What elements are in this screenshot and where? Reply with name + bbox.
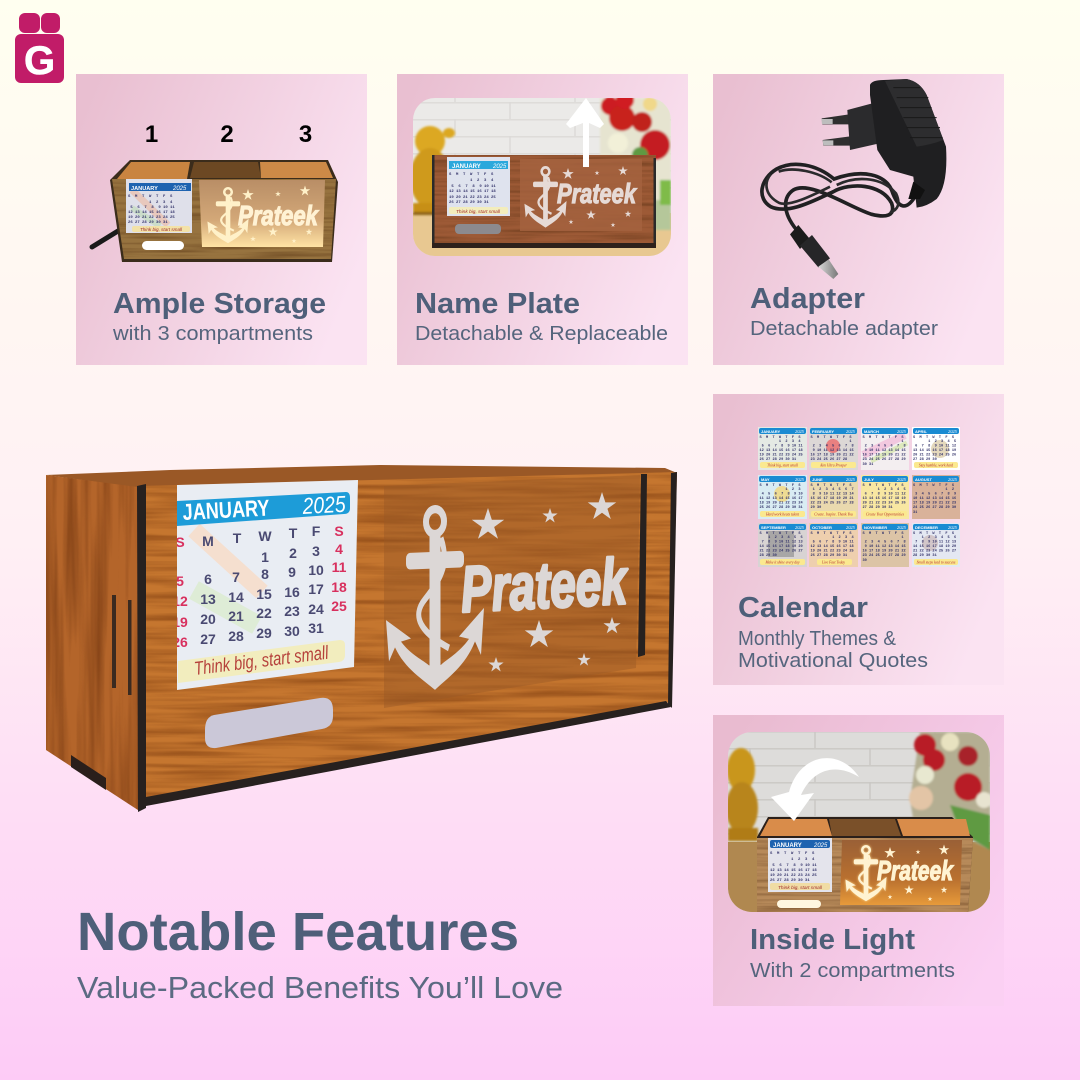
calendar card: JANUARY bbox=[182, 494, 270, 525]
calendar card: 4 bbox=[335, 541, 343, 557]
calendar card: 21 bbox=[228, 608, 244, 624]
calendar card: 17 bbox=[308, 581, 324, 597]
calendar: october bbox=[809, 523, 858, 567]
product: lit desk organiser bbox=[92, 160, 338, 262]
calendar card: 6 bbox=[204, 571, 212, 587]
calendar: january: JANUARY bbox=[761, 429, 781, 434]
main product: wooden desk organiser with calendar and name plate bbox=[46, 465, 677, 812]
calendar card: W bbox=[258, 528, 272, 544]
product photo with detachable plate: 26 27 28 29 30 31 bbox=[449, 201, 491, 205]
panel: calendar bbox=[713, 394, 1004, 685]
brand logo: gift box G: G bbox=[24, 39, 55, 83]
subtitle: Value-Packed Benefits You’ll Love bbox=[77, 970, 563, 1005]
calendar: may: 1 2 3 bbox=[760, 488, 803, 492]
calendar: december: 28 29 30 31 bbox=[913, 554, 939, 558]
calendar card: Think big, start small bbox=[193, 643, 330, 680]
calendar: november: 9 10 11 12 13 14 15 bbox=[862, 545, 908, 549]
product: lit desk organiser: 19 20 21 22 23 24 25 bbox=[128, 216, 177, 220]
calendar: may: 25 26 27 28 29 30 31 bbox=[760, 506, 805, 510]
heading: Name Plate bbox=[415, 288, 580, 320]
black edges and base bbox=[137, 472, 677, 812]
organiser front bbox=[140, 472, 677, 803]
compartment numbers: 1 bbox=[145, 121, 158, 148]
calendar: november: S M T W T F S bbox=[862, 532, 906, 536]
calendar card: 3 bbox=[312, 543, 320, 559]
product photo with light on: 26 27 28 29 30 31 bbox=[770, 879, 812, 883]
calendar: october: 19 20 21 22 23 24 25 bbox=[810, 550, 856, 554]
product: lit desk organiser: 12 13 14 15 16 17 18 bbox=[128, 211, 177, 215]
calendar: january: Think big, start small bbox=[767, 464, 798, 468]
name plate: Prateek bbox=[459, 546, 631, 627]
calendar: march bbox=[861, 427, 909, 470]
product photo with light on: 2025 bbox=[813, 843, 828, 849]
calendar: december: 21 22 23 24 25 26 27 bbox=[913, 550, 958, 554]
calendar: october: 2025 bbox=[846, 525, 856, 530]
heading: Ample Storage bbox=[113, 288, 326, 320]
calendar: july: 13 14 15 16 17 18 19 bbox=[862, 497, 908, 501]
product photo with light on: 5 6 7 8 9 10 11 bbox=[770, 864, 819, 868]
calendar: july: 1 2 3 4 5 bbox=[862, 488, 908, 492]
calendar card: 12 bbox=[172, 593, 188, 609]
calendar: october: 26 27 28 29 30 31 bbox=[810, 554, 849, 558]
calendar: august: 31 bbox=[913, 511, 919, 515]
caption line 2: Motivational Quotes bbox=[738, 650, 928, 672]
calendar: march: 2025 bbox=[897, 429, 907, 434]
calendar: september: 14 15 16 17 18 19 20 bbox=[760, 545, 805, 549]
calendar: december: S M T W T F S bbox=[913, 532, 956, 536]
calendar: june: S M T W T F S bbox=[810, 484, 854, 488]
light window bbox=[205, 698, 333, 748]
calendar: december: Small steps lead to success bbox=[917, 560, 956, 564]
calendar: june: JUNE bbox=[812, 477, 823, 482]
heading: Adapter bbox=[750, 283, 865, 315]
12-month calendar grid bbox=[758, 427, 960, 567]
calendar: april: APRIL bbox=[915, 429, 928, 434]
calendar card: 5 bbox=[176, 573, 184, 589]
calendar: december: DECEMBER bbox=[915, 525, 938, 530]
calendar card: 25 bbox=[331, 598, 347, 614]
calendar: february: 9 10 11 12 13 14 15 bbox=[810, 449, 856, 453]
calendar: april: S M T W T F S bbox=[913, 436, 956, 440]
calendar: september: Make it shine every day bbox=[764, 560, 800, 564]
calendar card: S bbox=[334, 523, 344, 539]
calendar card: T bbox=[233, 530, 242, 546]
calendar: august: 24 25 26 27 28 29 30 bbox=[913, 506, 958, 510]
calendar: february: 23 24 25 26 27 28 bbox=[810, 458, 849, 462]
calendar: september: 1 2 3 4 5 6 bbox=[760, 536, 805, 540]
calendar: october: 12 13 14 15 16 17 18 bbox=[810, 545, 856, 549]
calendar: september: 28 29 30 bbox=[760, 554, 779, 558]
product photo with detachable plate: JANUARY bbox=[452, 164, 481, 170]
calendar card: 14 bbox=[228, 589, 244, 605]
calendar: september: S M T W T F S bbox=[760, 532, 803, 536]
calendar: july: 20 21 22 23 24 25 26 bbox=[862, 502, 908, 506]
calendar card: 16 bbox=[284, 584, 300, 600]
calendar: february: S M T W T F S bbox=[810, 436, 854, 440]
panel: ample storage bbox=[76, 74, 367, 365]
calendar card: S bbox=[175, 534, 185, 550]
calendar card: 1 bbox=[261, 549, 269, 565]
calendar: september: 21 22 23 24 25 26 27 bbox=[760, 550, 805, 554]
calendar: november bbox=[861, 523, 909, 567]
calendar: december: 7 8 9 10 11 12 13 bbox=[913, 540, 958, 544]
calendar: february: FEBRUARY bbox=[812, 429, 834, 434]
calendar: november: 2 3 4 5 6 7 8 bbox=[862, 540, 908, 544]
calendar card: 10 bbox=[308, 562, 324, 578]
product photo with detachable plate: 1 2 3 4 bbox=[449, 179, 496, 183]
calendar card: 7 bbox=[232, 569, 240, 585]
calendar: may: 2025 bbox=[795, 477, 805, 482]
calendar card: 19 bbox=[172, 614, 188, 630]
calendar card: 31 bbox=[308, 620, 324, 636]
calendar card: 24 bbox=[308, 601, 324, 617]
calendar: november: 23 24 25 26 27 28 29 bbox=[862, 554, 908, 558]
calendar: march: 30 31 bbox=[862, 463, 875, 467]
calendar: february: 1 bbox=[810, 440, 854, 444]
heading: Inside Light bbox=[750, 924, 915, 956]
calendar: may: 4 5 6 7 8 9 10 bbox=[760, 492, 805, 496]
calendar: september bbox=[758, 523, 807, 567]
calendar: july: 2025 bbox=[897, 477, 907, 482]
calendar: march: 23 24 25 26 27 28 29 bbox=[862, 458, 908, 462]
calendar: march: 16 17 18 19 20 21 22 bbox=[862, 454, 908, 458]
calendar: july: JULY bbox=[864, 477, 874, 482]
calendar: september: 7 8 9 10 11 12 13 bbox=[760, 540, 805, 544]
calendar: august: 3 4 5 6 7 8 9 bbox=[913, 492, 958, 496]
calendar: january: 1 2 3 4 bbox=[760, 440, 803, 444]
calendar card: 9 bbox=[288, 564, 296, 580]
compartment numbers: 3 bbox=[299, 121, 312, 148]
product: lit desk organiser: 1 2 3 4 bbox=[128, 201, 175, 205]
calendar: march: 2 3 4 5 6 7 8 bbox=[862, 444, 908, 448]
name plate bbox=[384, 475, 640, 708]
calendar card: 22 bbox=[256, 605, 272, 621]
caption: With 2 compartments bbox=[750, 960, 955, 982]
calendar: august: 17 18 19 20 21 22 23 bbox=[913, 502, 958, 506]
product photo with detachable plate: S M T W T F S bbox=[449, 173, 496, 177]
product photo with light on: Think big, start small bbox=[778, 885, 823, 891]
calendar: august: S M T W T F S bbox=[913, 484, 956, 488]
calendar: september: 2025 bbox=[795, 525, 805, 530]
calendar: march: 1 bbox=[862, 440, 906, 444]
caption: Monthly Themes & bbox=[738, 628, 897, 650]
calendar: january bbox=[758, 427, 807, 470]
calendar: february: 16 17 18 19 20 21 22 bbox=[810, 454, 856, 458]
product: lit desk organiser: S M T W T F S bbox=[128, 195, 175, 199]
calendar: february bbox=[809, 427, 858, 470]
calendar: january: 2025 bbox=[795, 429, 805, 434]
calendar: june: 2025 bbox=[846, 477, 856, 482]
arrow: curved down into compartment bbox=[771, 758, 859, 821]
calendar: june: 1 2 3 4 5 6 7 bbox=[810, 488, 856, 492]
calendar: april: 20 21 22 23 24 25 26 bbox=[913, 454, 958, 458]
calendar: april bbox=[912, 427, 960, 470]
calendar: january: 12 13 14 15 16 17 18 bbox=[760, 449, 805, 453]
calendar: february: Aim Ultra Prosper bbox=[819, 464, 848, 468]
calendar: july: Create Your Opportunities bbox=[866, 512, 905, 516]
calendar card: 2025 bbox=[301, 491, 346, 519]
calendar: march: S M T W T F S bbox=[862, 436, 906, 440]
product photo with light on bbox=[726, 732, 992, 912]
calendar: april: Stay humble, work hard bbox=[919, 464, 953, 468]
calendar: may: Hard work beats talent bbox=[765, 512, 800, 516]
caption: Detachable & Replaceable bbox=[415, 323, 668, 345]
calendar: january: S M T W T F S bbox=[760, 436, 803, 440]
product photo with detachable plate: Think big, start small bbox=[456, 209, 501, 215]
calendar: october: 1 2 3 4 bbox=[810, 536, 856, 540]
product photo with light on: 12 13 14 15 16 17 18 bbox=[770, 869, 819, 873]
calendar: january: 19 20 21 22 23 24 25 bbox=[760, 454, 805, 458]
product photo with detachable plate: 2025 bbox=[492, 164, 507, 170]
calendar card: F bbox=[312, 523, 321, 539]
calendar: october: S M T W T F S bbox=[810, 532, 854, 536]
calendar: march: 9 10 11 12 13 14 15 bbox=[862, 449, 908, 453]
calendar card bbox=[172, 480, 358, 690]
calendar: june: 29 30 bbox=[810, 506, 823, 510]
calendar: may: MAY bbox=[761, 477, 770, 482]
calendar: july: 6 7 8 9 10 11 12 bbox=[862, 492, 908, 496]
title: Notable Features bbox=[77, 902, 519, 962]
product photo with detachable plate: 12 13 14 15 16 17 18 bbox=[449, 190, 498, 194]
calendar: june: 15 16 17 18 19 20 21 bbox=[810, 497, 856, 501]
calendar: october: OCTOBER bbox=[812, 525, 832, 530]
calendar: may: S M T W T F S bbox=[760, 484, 803, 488]
calendar card: 28 bbox=[228, 628, 244, 644]
product photo with light on: Prateek bbox=[877, 856, 954, 887]
product photo with light on: S M T W T F S bbox=[770, 852, 817, 856]
calendar: august: 2025 bbox=[948, 477, 958, 482]
organiser top rim bbox=[46, 465, 677, 488]
calendar: june: 8 9 10 11 12 13 14 bbox=[810, 492, 856, 496]
product: lit desk organiser: 26 27 28 29 30 31 bbox=[128, 221, 170, 225]
calendar card: 18 bbox=[331, 579, 347, 595]
calendar: july: S M T W T F S bbox=[862, 484, 906, 488]
calendar: december: 1 2 3 4 5 6 bbox=[913, 536, 958, 540]
calendar: august bbox=[912, 475, 960, 519]
arrow: up bbox=[566, 98, 604, 167]
calendar card: 27 bbox=[200, 631, 216, 647]
product photo with detachable plate: 19 20 21 22 23 24 25 bbox=[449, 196, 498, 200]
calendar: march: MARCH bbox=[864, 429, 879, 434]
calendar: december: 2025 bbox=[948, 525, 958, 530]
calendar: september: SEPTEMBER bbox=[761, 525, 786, 530]
product photo with light on: 19 20 21 22 23 24 25 bbox=[770, 874, 819, 878]
calendar: december bbox=[912, 523, 960, 567]
product: lit desk organiser: Prateek bbox=[238, 201, 319, 232]
calendar: june: 22 23 24 25 26 27 28 bbox=[810, 502, 856, 506]
calendar: april: 2025 bbox=[948, 429, 958, 434]
calendar card: 30 bbox=[284, 623, 300, 639]
calendar: february: 2 3 4 5 6 7 8 bbox=[810, 444, 856, 448]
panel: adapter bbox=[713, 74, 1004, 365]
calendar: august: AUGUST bbox=[915, 477, 932, 482]
heading: Calendar bbox=[738, 592, 868, 624]
calendar: october: Live Fast Today bbox=[821, 560, 845, 564]
product photo with detachable plate: 5 6 7 8 9 10 11 bbox=[449, 185, 498, 189]
calendar: november: NOVEMBER bbox=[864, 525, 887, 530]
calendar card: 20 bbox=[200, 611, 216, 627]
caption: Detachable adapter bbox=[750, 318, 938, 340]
calendar: january: 26 27 28 29 30 31 bbox=[760, 458, 798, 462]
calendar: january: 5 6 7 8 9 10 11 bbox=[760, 444, 805, 448]
calendar: february: 2025 bbox=[846, 429, 856, 434]
calendar card: 2 bbox=[289, 545, 297, 561]
product: lit desk organiser: Think big, start small bbox=[140, 227, 183, 232]
calendar: july: 27 28 29 30 31 bbox=[862, 506, 895, 510]
calendar: october: 5 6 7 8 9 10 11 bbox=[810, 540, 856, 544]
calendar: may bbox=[758, 475, 807, 519]
product: lit desk organiser: 2025 bbox=[172, 186, 187, 192]
calendar card: 13 bbox=[200, 591, 216, 607]
calendar: july bbox=[861, 475, 909, 519]
calendar: november: 2025 bbox=[897, 525, 907, 530]
compartment numbers: 2 bbox=[220, 121, 234, 148]
calendar card: 8 bbox=[261, 566, 269, 582]
calendar: april: 27 28 29 30 bbox=[913, 458, 939, 462]
calendar: august: 1 2 bbox=[913, 488, 956, 492]
brand logo: gift box G bbox=[15, 13, 64, 83]
calendar card: 29 bbox=[256, 625, 272, 641]
product photo with light on: 1 2 3 4 bbox=[770, 858, 817, 862]
calendar: april: 1 2 3 4 5 bbox=[913, 440, 958, 444]
calendar: may: 18 19 20 21 22 23 24 bbox=[760, 502, 805, 506]
icon: power adapter bbox=[762, 79, 946, 279]
product: lit desk organiser: JANUARY bbox=[131, 186, 158, 192]
product photo with detachable plate bbox=[410, 91, 671, 256]
calendar: june bbox=[809, 475, 858, 519]
calendar: november: 16 17 18 19 20 21 22 bbox=[862, 550, 908, 554]
calendar card: 11 bbox=[332, 559, 347, 575]
product photo with light on: JANUARY bbox=[773, 843, 802, 849]
caption: with 3 compartments bbox=[112, 323, 313, 345]
compartment numbers bbox=[145, 121, 312, 148]
calendar card: 23 bbox=[284, 603, 300, 619]
calendar card: 15 bbox=[256, 586, 272, 602]
product photo with detachable plate: Prateek bbox=[557, 179, 637, 210]
organiser side bbox=[46, 475, 138, 810]
calendar: august: 10 11 12 13 14 15 16 bbox=[913, 497, 958, 501]
calendar card: T bbox=[289, 525, 298, 541]
calendar: november: 1 bbox=[862, 536, 906, 540]
calendar: november: 30 bbox=[862, 559, 869, 563]
product: lit desk organiser: 5 6 7 8 9 10 11 bbox=[128, 206, 177, 210]
calendar: april: 13 14 15 16 17 18 19 bbox=[913, 449, 958, 453]
calendar: may: 11 12 13 14 15 16 17 bbox=[760, 497, 805, 501]
calendar card: 26 bbox=[172, 634, 188, 650]
panel: name plate bbox=[397, 74, 688, 365]
panel: inside light bbox=[713, 715, 1004, 1006]
calendar card: M bbox=[202, 533, 214, 549]
calendar: june: Create. Inspire. Thank You bbox=[814, 512, 853, 516]
calendar: april: 6 7 8 9 10 11 12 bbox=[913, 444, 958, 448]
calendar: december: 14 15 16 17 18 19 20 bbox=[913, 545, 958, 549]
